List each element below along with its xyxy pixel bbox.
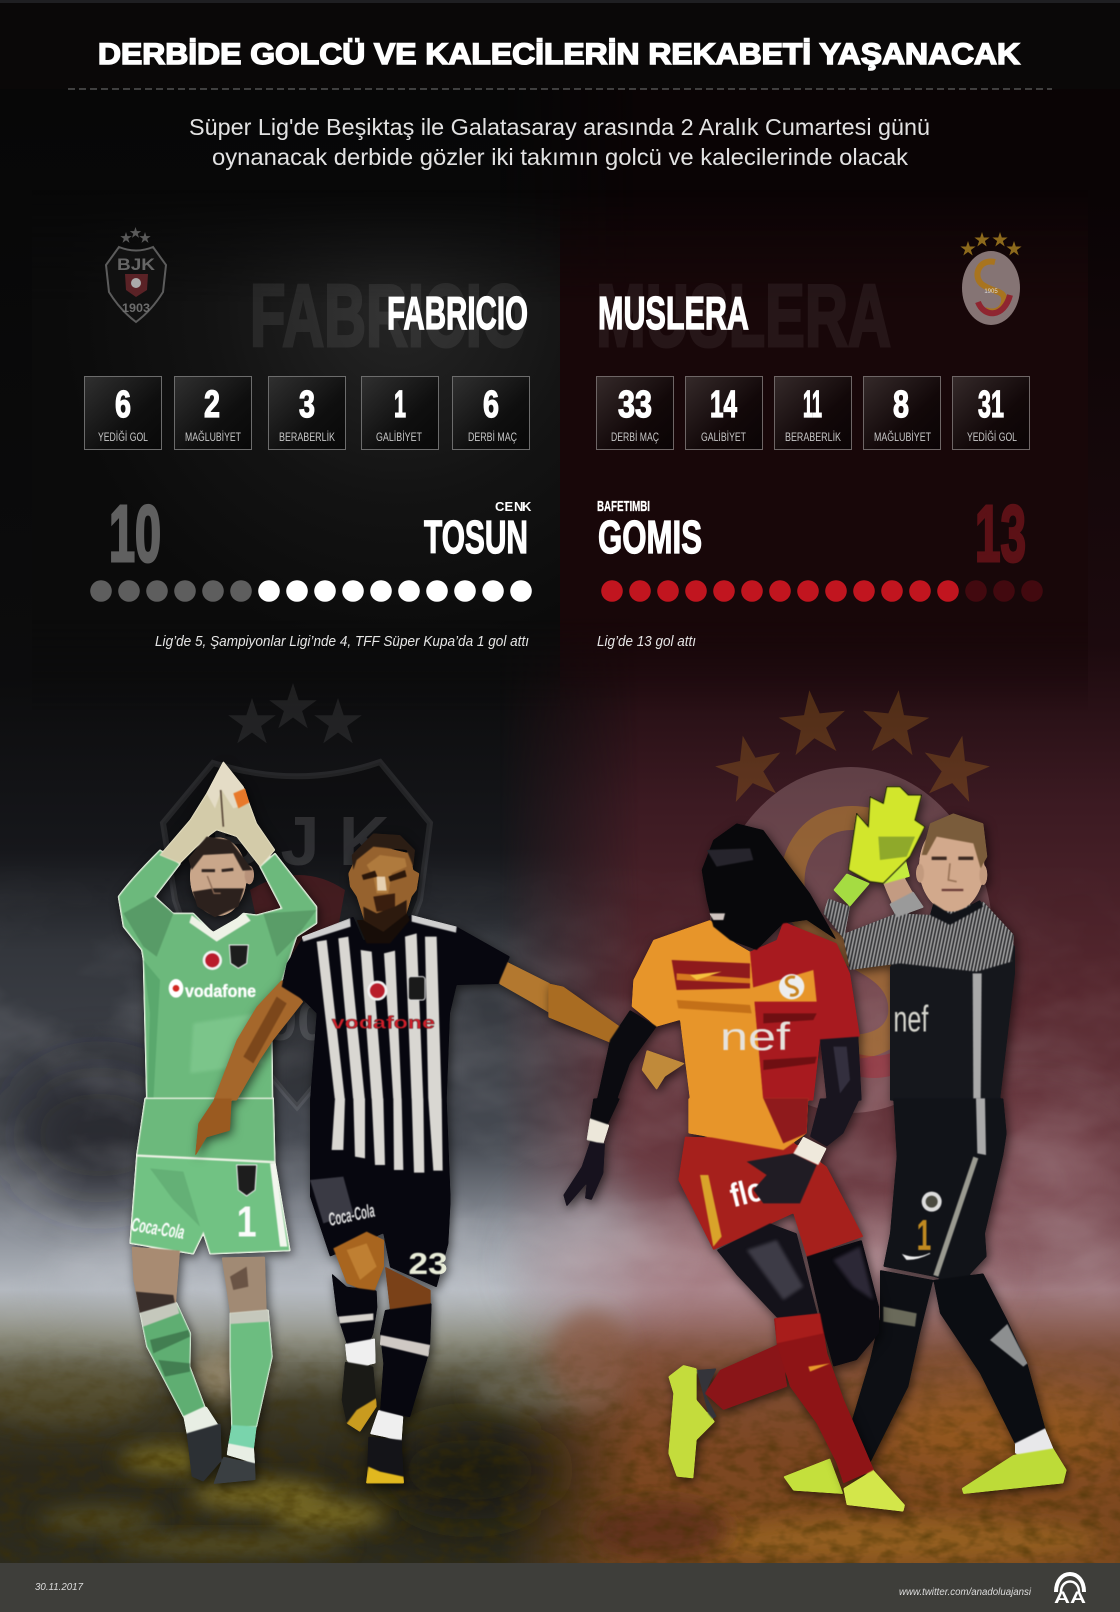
surname: Gomis: GOMIS (598, 511, 702, 563)
stat: galibiyet 1 (362, 376, 438, 450)
stat: yediği gol 31: YEDİĞİ GOL (967, 429, 1017, 444)
subtitle text: Süper Lig'de Beşiktaş ile Galatasaray arasında 2 Aralık Cumartesi günü (189, 114, 930, 140)
stat: beraberlik 3: 3 (299, 384, 315, 426)
player: Cenk Tosun in black and white stripes: 23 (408, 1247, 448, 1281)
stat: galibiyet 14: 14 (710, 384, 737, 426)
icon: Anadolu Agency logo: AA (1054, 1588, 1086, 1607)
surname: Tosun: TOSUN (424, 511, 528, 563)
icon: small Beşiktaş crest (106, 227, 166, 322)
ghost name: Fabricio: FABRICIO (250, 266, 527, 365)
stat boxes: Fabricio (84, 376, 530, 450)
stat: mağlubiyet 2: 2 (204, 384, 220, 426)
dashed divider under title (68, 88, 1052, 90)
goals number: Tosun 10: 10 (109, 489, 161, 578)
goals number: Gomis 13: 13 (975, 489, 1026, 578)
stat: derbi maç 33 (596, 376, 674, 450)
note: Gomis goals: Lig’de 13 gol attı (597, 633, 696, 650)
centre panels behind statistics (0, 0, 1120, 560)
ghost crest: Galatasaray (709, 687, 995, 1113)
stat: mağlubiyet 2 (174, 376, 252, 450)
stat: beraberlik 3: BERABERLİK (279, 430, 335, 444)
player: Fabricio in green goalkeeper kit (118, 762, 317, 1484)
first name: Bafetimbi: BAFETIMBI (597, 498, 650, 515)
player: Gomis in Galatasaray kit: nef (720, 1015, 790, 1059)
stat: yediği gol 6 (84, 376, 162, 450)
footer bar (0, 1563, 1120, 1612)
stat: yediği gol 31: 31 (978, 384, 1004, 426)
player: Fabricio in green goalkeeper kit: 1 (237, 1199, 257, 1247)
icon: Anadolu Agency logo (1054, 1574, 1086, 1607)
stat: mağlubiyet 8: 8 (893, 384, 909, 426)
player: Cenk Tosun in black and white stripes (195, 833, 550, 1483)
stat: yediği gol 31 (952, 376, 1030, 450)
stat: derbi maç 33: DERBİ MAÇ (611, 430, 659, 444)
icon: small Beşiktaş crest: 1903 (122, 301, 150, 315)
name: Muslera: MUSLERA (598, 287, 749, 339)
footer date: 30.11.2017 (35, 1582, 83, 1593)
stat: galibiyet 14 (686, 376, 762, 450)
stat: mağlubiyet 8: MAĞLUBİYET (874, 429, 931, 444)
player: Gomis in Galatasaray kit: flo (726, 1171, 768, 1215)
stat: galibiyet 14: GALİBİYET (701, 430, 746, 444)
player: Fabricio in green goalkeeper kit: vodafone (185, 981, 256, 1001)
ghost crest: Beşiktaş (163, 683, 430, 1107)
stat: beraberlik 11: BERABERLİK (785, 430, 841, 444)
stat: derbi maç 6: DERBİ MAÇ (468, 430, 517, 444)
player: Muslera in black goalkeeper kit: 1 (917, 1212, 931, 1260)
stat: galibiyet 1: GALİBİYET (376, 430, 422, 444)
stat: yediği gol 6: 6 (115, 384, 131, 426)
ghost crest: Beşiktaş: B J K (211, 802, 389, 880)
player: Fabricio in green goalkeeper kit: Coca-Cola (130, 1215, 186, 1244)
note: Tosun goals: Lig’de 5, Şampiyonlar Ligi’nde 4, TFF Süper Kupa’da 1 gol attı (155, 633, 529, 650)
stat: mağlubiyet 8 (864, 376, 940, 450)
subtitle text: oynanacak derbide gözler iki takımın golcü ve kalecilerinde olacak (212, 144, 909, 170)
ghost crest: Beşiktaş: 1903 (235, 989, 359, 1052)
player: Cenk Tosun in black and white stripes: vodafone (332, 1013, 435, 1033)
icon: small Galatasaray crest (960, 232, 1022, 325)
title: DERBİDE GOLCÜ VE KALECİLERİN REKABETİ YAŞANACAK (98, 38, 1020, 71)
subtitle text (189, 114, 930, 170)
stat: mağlubiyet 2: MAĞLUBİYET (185, 429, 241, 444)
stat: derbi maç 6 (452, 376, 530, 450)
icon: small Beşiktaş crest: BJK (117, 255, 156, 274)
player: Muslera in black goalkeeper kit: nef (893, 999, 929, 1040)
footer twitter address: www.twitter.com/anadoluajansi (899, 1587, 1032, 1598)
stat: beraberlik 11 (774, 376, 852, 450)
icon: small Galatasaray crest: 1905 (984, 289, 998, 295)
stat boxes: Muslera (596, 376, 1030, 450)
player: Muslera in black goalkeeper kit (783, 787, 1067, 1494)
stat: beraberlik 11: 11 (803, 384, 822, 426)
ghost name: Muslera: MUSLERA (596, 266, 891, 365)
stat: beraberlik 3 (268, 376, 346, 450)
first name: Cenk: CENK (495, 499, 532, 514)
goal dots: Gomis (601, 580, 1043, 602)
player: Gomis in Galatasaray kit (548, 823, 905, 1512)
stat: derbi maç 6: 6 (483, 384, 499, 426)
stat: derbi maç 33: 33 (618, 384, 652, 426)
goal dots: Tosun (90, 580, 532, 602)
stat: yediği gol 6: YEDİĞİ GOL (98, 429, 148, 444)
player: Cenk Tosun in black and white stripes: Coca-Cola (326, 1200, 376, 1230)
name: Fabricio: FABRICIO (387, 287, 528, 339)
stat: galibiyet 1: 1 (394, 384, 406, 426)
